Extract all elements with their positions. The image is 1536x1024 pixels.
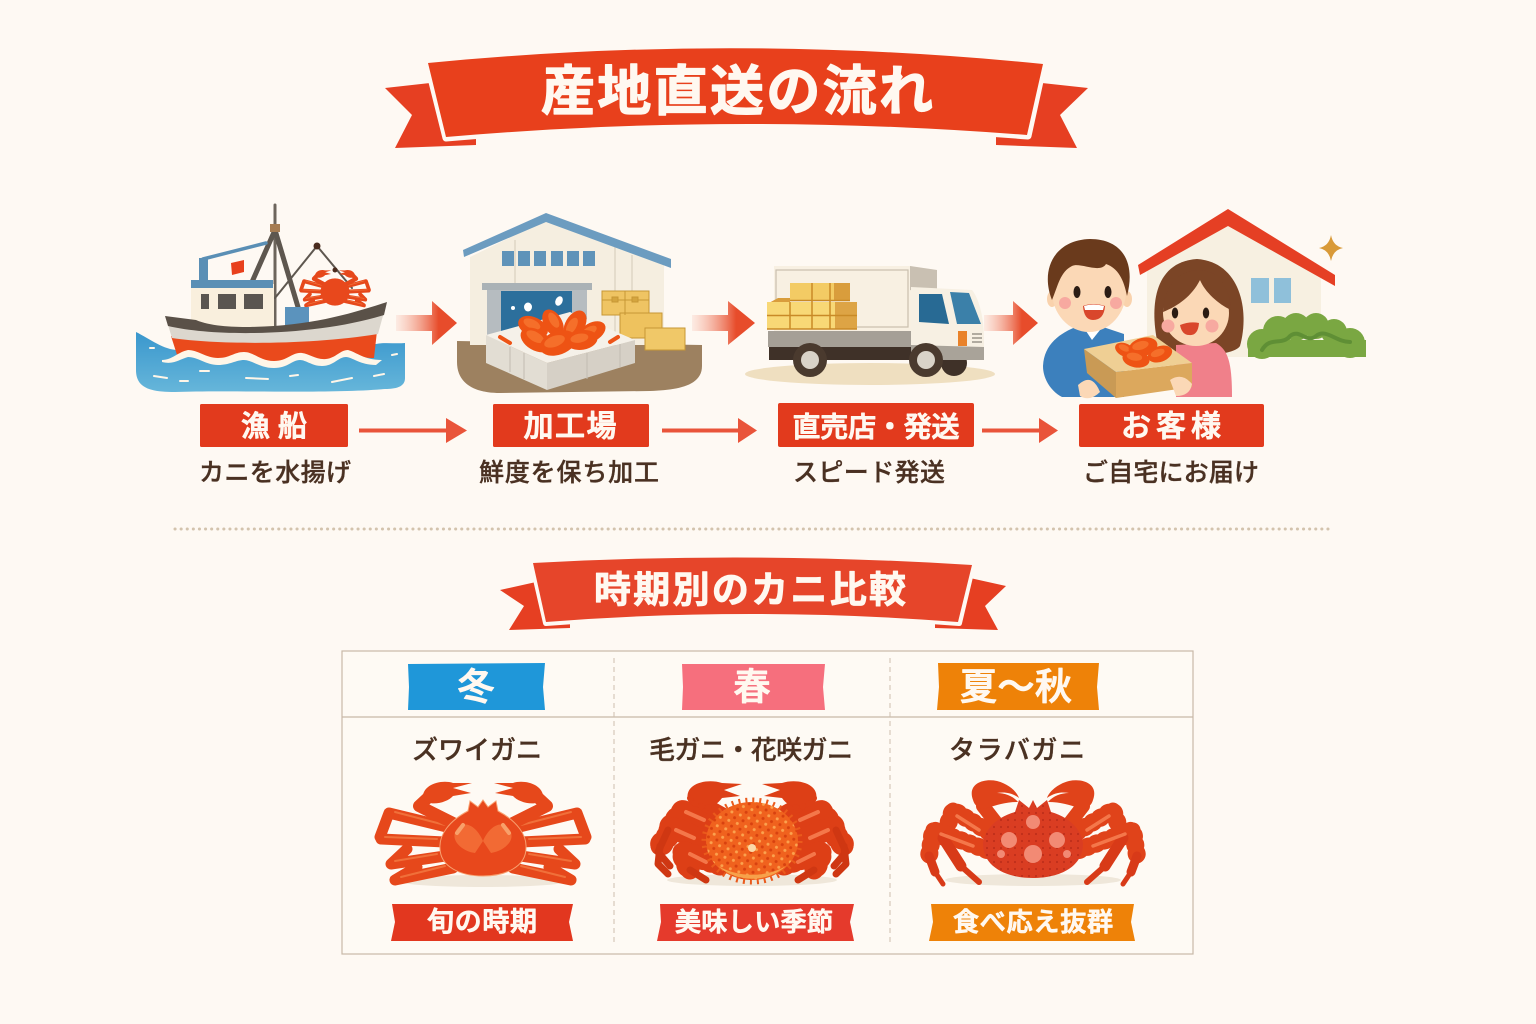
comparison table [342,651,1193,954]
crab names: ズワイガニ [412,735,542,765]
ground [457,341,702,393]
cabin [191,284,274,328]
step 1 illustration: fishing boat [136,205,405,392]
cab [911,287,984,360]
step label: 加工場: 加工場 [524,410,616,444]
hull [171,322,378,364]
crab names [412,735,1085,765]
crab: snow crab [380,782,586,887]
title text: 産地直送の流れ [541,62,933,122]
note ribbon: satisfying portion: 食べ応え抜群 [953,907,1113,937]
season tag: spring: 春 [734,666,770,708]
step label: 直売店・発送 [778,403,974,447]
foam [162,350,382,368]
hands [1078,380,1100,398]
man [1043,239,1132,397]
cargo box [774,266,937,334]
crab on deck [301,270,369,306]
foam crate of crabs [486,335,547,390]
step captions [199,459,1259,487]
woman [1154,259,1244,397]
step captions: カニを水揚げ [199,459,351,487]
step label: 加工場 [493,404,649,447]
step label: 漁船: 漁船 [241,410,307,443]
crab: hairy crab [658,781,846,886]
mast and rigging [203,205,352,326]
step captions: ご自宅にお届け [1083,459,1259,487]
step 2 illustration: processing plant [457,213,702,393]
crab names: タラバガニ [949,735,1085,765]
comparison title text: 時期別のカニ比較 [594,570,906,610]
note ribbon: delicious season: 美味しい季節 [675,907,833,937]
crab names: 毛ガニ・花咲ガニ [649,735,853,765]
chassis [768,331,912,347]
sparkle [1319,235,1343,261]
wheels [793,343,827,377]
note ribbon: peak season: 旬の時期 [427,907,537,937]
crab: king crab [929,780,1137,886]
season tag: summer to autumn [937,663,1099,710]
season tag: summer to autumn: 夏〜秋 [960,666,1072,708]
house [1147,222,1321,357]
water [136,332,405,392]
building [470,220,664,345]
step captions: スピード発送 [793,459,945,487]
step label: 漁船 [200,404,348,447]
step 4 illustration: customers and house [1043,209,1366,398]
thin arrow 3 [982,418,1058,443]
box of crabs [1084,349,1116,398]
season tag: winter: 冬 [458,666,494,708]
arrow: boat to factory [396,301,457,345]
title ribbon [385,48,1088,148]
season tag: spring [682,664,825,710]
rear wheel shadow [941,350,967,376]
ground [745,363,995,385]
loading door [482,283,592,290]
note ribbon: satisfying portion [929,904,1135,941]
note ribbon: peak season [391,904,573,941]
step label: お客様 [1079,404,1264,447]
cardboard boxes [602,291,685,350]
arrow: truck to customer [984,301,1038,345]
thin arrow 2 [662,418,757,443]
bush [1247,313,1366,359]
season tag: winter [408,663,545,710]
step label: 直売店・発送: 直売店・発送 [792,412,960,442]
windows [502,251,595,266]
comparison ribbon [500,557,1006,630]
thin arrow 1 [359,418,467,443]
step label: お客様: お客様 [1121,410,1221,444]
arrow: factory to truck [692,301,755,345]
step 3 illustration: delivery truck [745,266,995,385]
load of boxes [767,283,857,329]
note ribbon: delicious season [657,904,854,941]
roof [463,213,671,268]
step captions: 鮮度を保ち加工 [479,459,659,487]
water ripples [150,348,397,382]
